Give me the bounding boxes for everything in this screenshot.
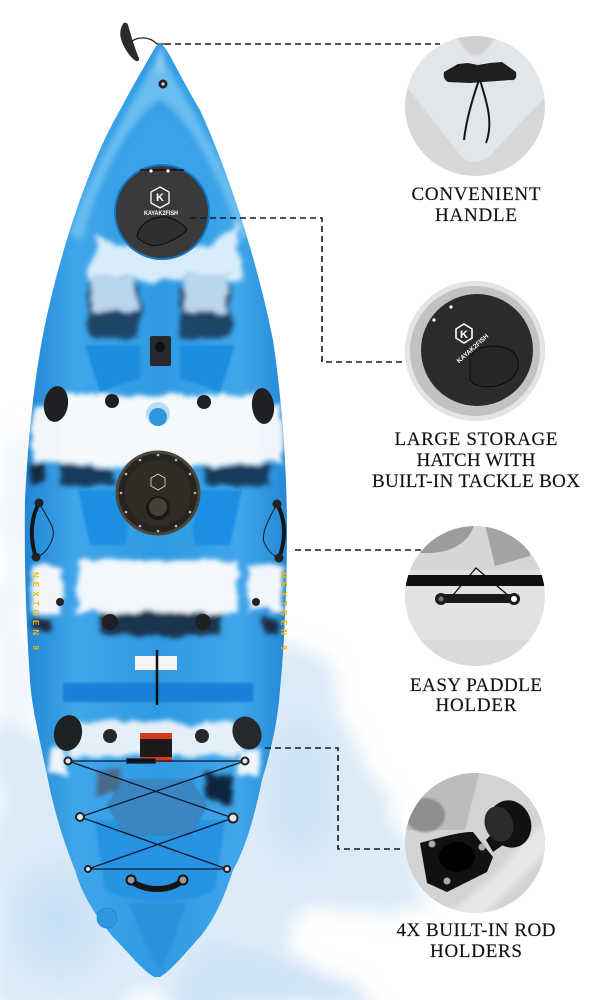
label: rod holders: HOLDERS xyxy=(430,941,522,962)
label: rod holders xyxy=(396,920,556,962)
centre hatch xyxy=(117,452,199,534)
storage hatch with logo xyxy=(114,164,210,260)
label: convenient handle xyxy=(412,184,541,226)
detail circle: convenient handle xyxy=(405,36,545,176)
leader: handle xyxy=(165,43,440,45)
hull decals: NEXTGEN 9 xyxy=(279,572,288,651)
side handles xyxy=(32,503,39,557)
deck fittings xyxy=(32,336,284,928)
bungee cords xyxy=(64,758,248,872)
seat recesses xyxy=(78,276,242,545)
label: convenient handle: HANDLE xyxy=(435,205,517,226)
bow deck highlights xyxy=(70,48,252,240)
watercolor background wash xyxy=(0,420,425,1000)
leader: rod holders xyxy=(265,748,404,849)
marbled colour bands xyxy=(28,222,282,801)
detail circle: storage hatch: KAYAK2FISH xyxy=(456,333,490,365)
detail circle: rod holders xyxy=(405,773,545,913)
bow cleat xyxy=(158,80,168,88)
storage hatch with logo: K xyxy=(156,192,164,204)
round plugs xyxy=(105,394,119,408)
label: storage hatch: HATCH WITH xyxy=(416,450,536,471)
storage hatch with logo: KAYAK2FISH xyxy=(144,210,178,217)
label: storage hatch: BUILT-IN TACKLE BOX xyxy=(372,471,580,492)
flush mount xyxy=(150,336,171,366)
label: rod holders: 4X BUILT-IN ROD xyxy=(396,920,556,941)
handle at kayak bow xyxy=(120,23,165,61)
stern handle xyxy=(130,880,183,889)
detail circle: paddle holder xyxy=(405,526,545,666)
centre strap xyxy=(135,656,177,670)
stern deck xyxy=(95,780,225,970)
detail circle: storage hatch xyxy=(405,281,545,421)
label: storage hatch: LARGE STORAGE xyxy=(394,429,558,450)
safety warning label xyxy=(140,733,172,762)
leader: storage hatch xyxy=(190,218,404,362)
label: paddle holder: EASY PADDLE xyxy=(410,675,542,696)
label: convenient handle: CONVENIENT xyxy=(412,184,541,205)
detail circle: storage hatch: K xyxy=(460,329,468,341)
label: paddle holder: HOLDER xyxy=(436,695,517,716)
hull decals xyxy=(31,572,288,651)
hull decals: NEXTGEN 9 xyxy=(31,572,40,651)
kayak hull xyxy=(20,40,295,985)
label: storage hatch xyxy=(372,429,580,492)
label: paddle holder xyxy=(410,675,542,716)
tank well footbrace xyxy=(63,683,253,702)
leader: paddle holder xyxy=(295,549,422,551)
side rod holders xyxy=(42,385,70,423)
